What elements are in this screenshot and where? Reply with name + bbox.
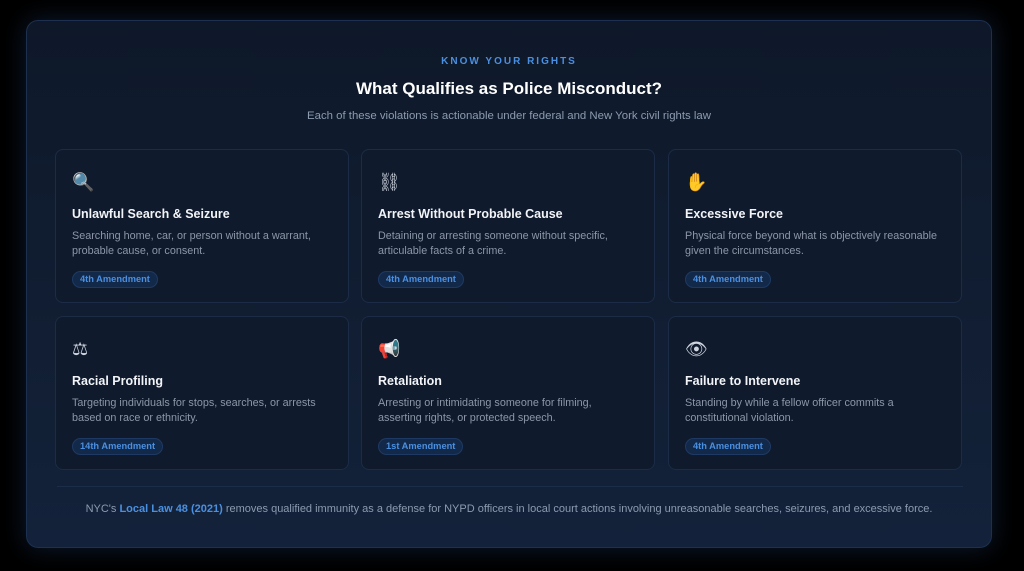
badge [685,438,771,455]
card description: Searching home, car, or person without a warrant, probable cause, or consent. [72,230,311,257]
card description: Arresting or intimidating someone for filming, asserting rights, or protected speech. [378,397,592,424]
card: unlawful search [55,149,349,303]
card description: Detaining or arresting someone without specific, articulable facts of a crime. [378,230,608,257]
subtitle: Each of these violations is actionable under federal and New York civil rights law [307,110,711,122]
title: What Qualifies as Police Misconduct? [356,79,662,98]
card: retaliation [361,316,655,470]
badge: 4th Amendment [80,274,150,284]
icon: hand: ✋ [685,172,707,192]
icon: megaphone: 📢 [378,339,400,359]
badge [685,271,771,288]
badge: 14th Amendment [80,441,155,451]
card: racial profiling [55,316,349,470]
badge: 4th Amendment [693,441,763,451]
badge: 4th Amendment [693,274,763,284]
badge [72,271,158,288]
card: excessive force [668,149,962,303]
card description: Targeting individuals for stops, searches, or arrests based on race or ethnicity. [72,397,316,424]
card description: Standing by while a fellow officer commits a constitutional violation. [685,397,894,424]
card: arrest [361,149,655,303]
icon: chains: ⛓ [378,172,401,192]
badge: 1st Amendment [386,441,455,451]
badge [378,438,463,455]
card description: Physical force beyond what is objectively reasonable given the circumstances. [685,230,937,257]
card: failure to intervene [668,316,962,470]
badge [72,438,163,455]
card title: Excessive Force [685,207,783,221]
icon: magnifier: 🔍 [72,172,94,192]
badge: 4th Amendment [386,274,456,284]
card title: Racial Profiling [72,374,163,388]
footer note: NYC's Local Law 48 (2021) removes qualified immunity as a defense for NYPD officers in local court actions involving unreasonable searches, seizures, and excessive force. [86,503,932,515]
card title: Retaliation [378,374,442,388]
badge [378,271,464,288]
card title: Arrest Without Probable Cause [378,207,563,221]
card title: Failure to Intervene [685,374,800,388]
kicker: KNOW YOUR RIGHTS [441,56,577,67]
icon: scales: ⚖ [72,339,88,359]
icon: eye: 👁 [685,339,708,359]
card title: Unlawful Search & Seizure [72,207,230,221]
